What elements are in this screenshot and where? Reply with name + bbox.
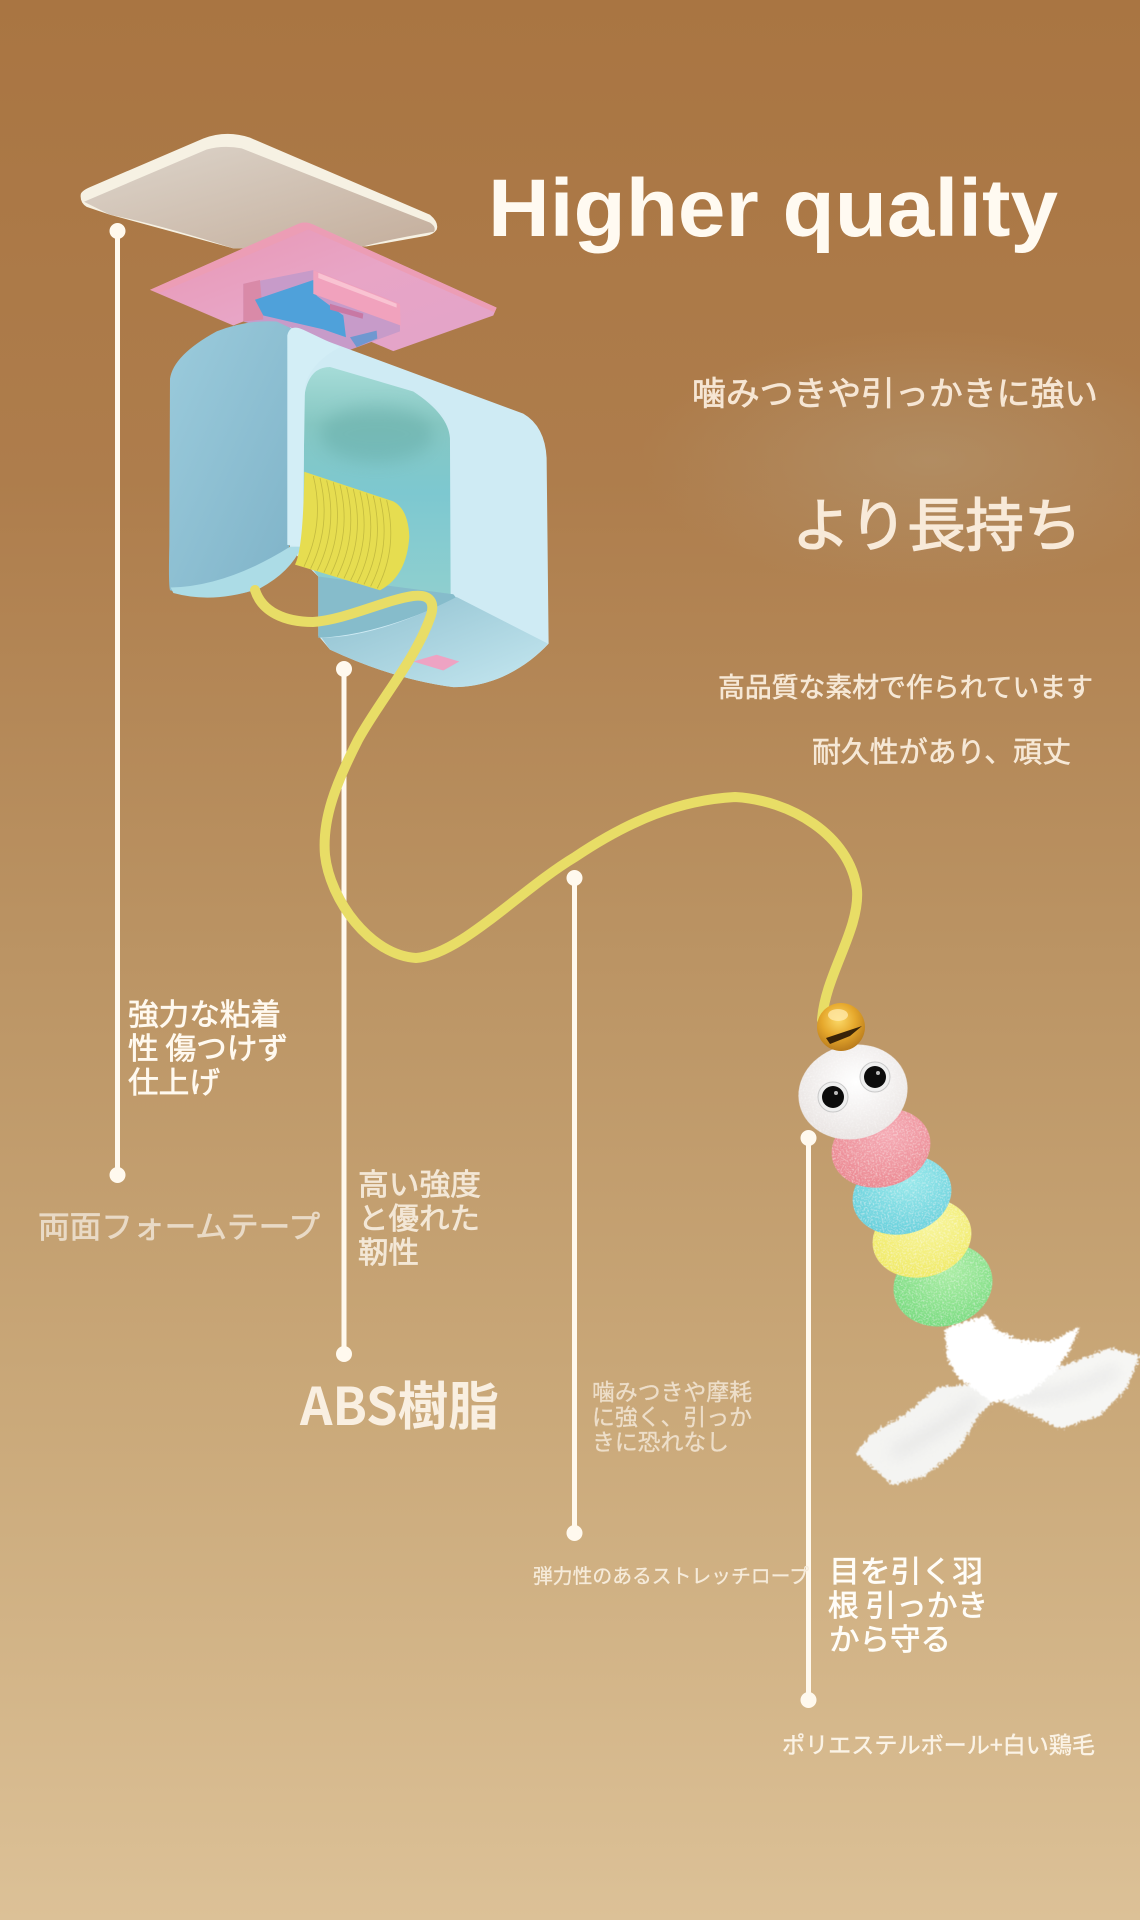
foam tape plate	[81, 134, 437, 248]
background haze	[640, 330, 1140, 590]
pink mounting plate	[150, 222, 497, 351]
callout: eye-catching feathers	[828, 1547, 988, 1659]
callout: bite and wear resistance: に強く、引っか	[592, 1398, 752, 1432]
callout: strong adhesion: 性 傷つけず	[128, 1024, 288, 1068]
feathers	[860, 1315, 1135, 1482]
callout: high strength and toughness: 靭性	[358, 1228, 419, 1272]
blue ball	[844, 1145, 960, 1245]
callout: high strength and toughness: と優れた	[358, 1194, 480, 1238]
subheading: resistant to bites and scratches: 噛みつきや引っかきに強い	[692, 367, 1098, 415]
blue housing: opening	[303, 367, 451, 596]
callout: strong adhesion: 強力な粘着	[128, 990, 281, 1034]
callout: bite and wear resistance: きに恐れなし	[592, 1423, 729, 1457]
callout: bite and wear resistance: 噛みつきや摩耗	[592, 1373, 752, 1407]
leader line: stretch rope	[566, 870, 582, 1541]
label: double-sided foam tape: 両面フォームテープ	[38, 1202, 320, 1247]
callout: high strength and toughness: 高い強度	[358, 1160, 481, 1204]
yellow ball	[864, 1188, 980, 1288]
callout: high strength and toughness	[358, 1160, 481, 1272]
title: Higher quality	[488, 163, 1058, 254]
heading: longer lasting: より長持ち	[792, 479, 1082, 563]
label: ABS resin: ABS樹脂	[299, 1365, 499, 1440]
feather: right	[987, 1352, 1135, 1425]
right eye	[860, 1062, 890, 1092]
callout: eye-catching feathers: から守る	[829, 1615, 951, 1659]
label: polyester ball and white chicken feather: ポリエステルボール+白い鶏毛	[782, 1726, 1095, 1760]
feather: top	[945, 1315, 1080, 1403]
pink ball	[823, 1098, 939, 1198]
caterpillar ball toy	[788, 1003, 1001, 1337]
callout: bite and wear resistance	[592, 1373, 752, 1457]
illustration: exploded wall mount	[81, 134, 549, 687]
blue housing: lower wall	[318, 576, 457, 638]
leader line: foam tape	[110, 223, 126, 1183]
gold bell	[817, 1003, 865, 1051]
yellow elastic rope	[255, 590, 857, 1020]
yellow spool	[295, 472, 409, 590]
callout: eye-catching feathers: 根 引っかき	[828, 1581, 988, 1625]
feather: left	[860, 1387, 1000, 1482]
leader line: ABS resin	[336, 661, 352, 1362]
text: high quality materials: 高品質な素材で作られています	[718, 666, 1093, 705]
blue housing: bottom face	[322, 597, 548, 687]
text: durable and sturdy: 耐久性があり、頑丈	[812, 729, 1071, 771]
callout: strong adhesion	[128, 990, 288, 1102]
leader line: ball and feather	[800, 1130, 816, 1708]
pink clip detail	[413, 655, 459, 671]
callout: eye-catching feathers: 目を引く羽	[829, 1547, 983, 1591]
callout: strong adhesion: 仕上げ	[128, 1058, 220, 1102]
blue housing: left arm	[169, 321, 340, 598]
label: elastic stretch rope: 弾力性のあるストレッチロープ	[533, 1560, 809, 1589]
blue housing: right body	[290, 327, 549, 687]
left eye	[818, 1082, 848, 1112]
white head	[788, 1033, 918, 1151]
green ball	[885, 1233, 1001, 1337]
